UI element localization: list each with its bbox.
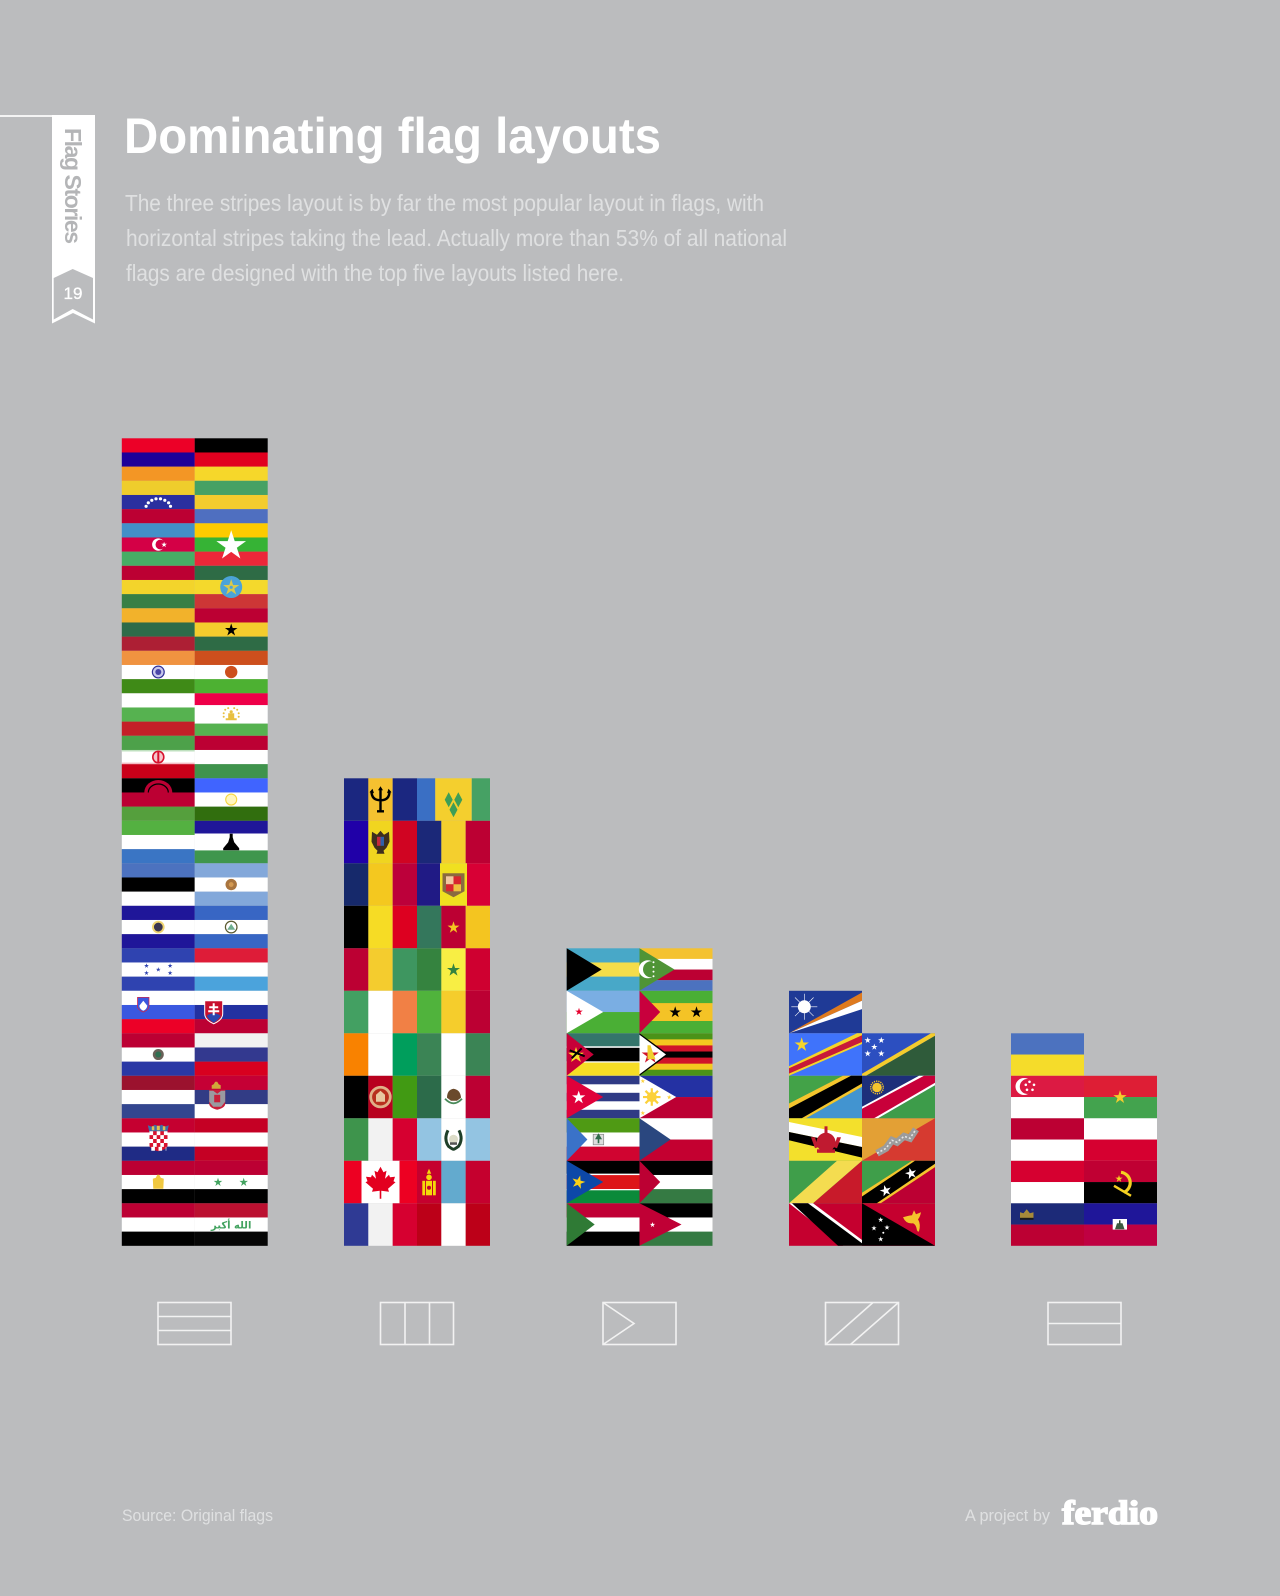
- flag: Mozambique: [567, 1033, 640, 1076]
- flag: Brunei: [789, 1118, 862, 1161]
- source note: Source: Original flags: [122, 1506, 273, 1525]
- flag: Niger: [195, 651, 268, 693]
- flag: Equatorial Guinea: [567, 1118, 640, 1161]
- flag: Monaco-style red white: [1011, 1118, 1084, 1161]
- flag: Peru: [417, 1203, 490, 1246]
- flag: Cameroon: [417, 906, 490, 948]
- column: horizontal two stripes: [1011, 1033, 1157, 1246]
- intro text: horizontal stripes taking the lead. Actually more than 53% of all national: [126, 225, 787, 251]
- flag: Indonesia: [1011, 1161, 1084, 1203]
- flag: Andorra: [417, 863, 490, 906]
- column: diagonal: [789, 991, 935, 1246]
- intro text: flags are designed with the top five layouts listed here.: [126, 260, 624, 286]
- flag: Ivory Coast: [344, 1033, 417, 1076]
- flag: Tanzania: [789, 1076, 862, 1118]
- flag: India: [122, 651, 195, 693]
- flag: Germany: [195, 438, 268, 481]
- icon: three vertical stripes: [380, 1302, 454, 1344]
- column: vertical three stripes: [344, 778, 490, 1246]
- flag: Guatemala: [417, 1118, 490, 1161]
- flag: Djibouti: [567, 991, 640, 1033]
- flag: Canada: [344, 1161, 417, 1203]
- flag: Saint Vincent: [417, 778, 490, 821]
- bookmark ribbon: 19: [64, 284, 82, 303]
- flag: Egypt: [122, 1161, 195, 1203]
- flag: Bhutan: [862, 1118, 935, 1161]
- flag: Mexico: [417, 1076, 490, 1118]
- credit: ferdio: [1062, 1495, 1158, 1532]
- intro text: The three stripes layout is by far the most popular layout in flags, with: [125, 190, 764, 216]
- flag: Slovenia: [122, 991, 195, 1033]
- flag: Romania: [417, 821, 490, 863]
- flag: Barbados: [344, 778, 417, 821]
- flag: Russia: [195, 1033, 268, 1076]
- flag: Jordan: [640, 1203, 712, 1246]
- flag: Saint Kitts and Nevis: [862, 1161, 935, 1203]
- title: Dominating flag layouts: [124, 108, 661, 164]
- flag: Sudan: [567, 1203, 640, 1246]
- flag: Syria: [195, 1161, 268, 1203]
- flag: Mongolia: [417, 1161, 490, 1203]
- flag: Philippines: [640, 1076, 712, 1118]
- flag: El Salvador: [122, 906, 195, 948]
- flag: Cuba: [567, 1076, 640, 1118]
- flag: Czech Republic: [640, 1118, 712, 1161]
- flag: Yemen: [122, 1203, 195, 1246]
- flag: Ghana: [195, 608, 268, 651]
- flag: Argentina: [195, 863, 268, 906]
- flag: Honduras: [122, 948, 195, 991]
- flag: Moldova: [344, 821, 417, 863]
- icon: two horizontal stripes: [1048, 1302, 1121, 1344]
- flag: Comoros: [639, 948, 712, 991]
- intro text: [125, 190, 787, 286]
- flag: Singapore: [1011, 1076, 1084, 1118]
- flag: Bulgaria: [122, 693, 195, 736]
- flag: Italy: [344, 1118, 417, 1161]
- flag: Gabon: [195, 481, 268, 523]
- flag: Poland: [1084, 1118, 1157, 1161]
- flag: Nicaragua: [195, 906, 268, 948]
- flag: Papua New Guinea: [862, 1203, 935, 1246]
- icon: three horizontal stripes: [158, 1302, 231, 1344]
- flag: France: [344, 1203, 417, 1246]
- flag: Palestine: [640, 1161, 712, 1203]
- flag: Lesotho: [195, 821, 268, 863]
- flag: Myanmar: [195, 523, 268, 566]
- flag: Solomon Islands: [862, 1033, 935, 1076]
- icon: diagonal band: [826, 1302, 898, 1344]
- icon: hoist triangle: [603, 1302, 676, 1344]
- flag: Hungary: [195, 736, 268, 778]
- flag: Senegal: [417, 948, 490, 991]
- flag: Liechtenstein: [1011, 1203, 1084, 1246]
- flag: Luxembourg: [195, 948, 268, 991]
- flag: Marshall Islands: [789, 991, 862, 1033]
- flag: Republic of Congo: [789, 1161, 862, 1203]
- column: triangle at hoist: [567, 948, 712, 1246]
- flag: Bahamas: [567, 948, 640, 991]
- flag: Guinea: [344, 948, 417, 991]
- flag: Iran: [122, 736, 195, 778]
- flag: Tajikistan: [195, 693, 268, 736]
- flag: Afghanistan: [344, 1076, 417, 1118]
- flag: Angola: [1084, 1161, 1157, 1203]
- flag: DR Congo: [789, 1033, 862, 1076]
- flag: Estonia: [122, 863, 195, 906]
- flag: Uzbek-style blue white green: [195, 778, 268, 821]
- flag: Ireland: [344, 991, 417, 1033]
- flag: Yugoslavia-style red white blue: [122, 1076, 195, 1118]
- credit: A project by: [965, 1506, 1050, 1525]
- flag: Serbia: [195, 1076, 268, 1118]
- flag: Austria: [195, 1118, 268, 1161]
- flag: Malawi: [122, 778, 195, 821]
- column: horizontal three stripes: [122, 438, 268, 1246]
- flag: Burkina Faso: [1084, 1076, 1157, 1118]
- flag: Trinidad and Tobago: [789, 1203, 862, 1246]
- flag: Haiti: [1084, 1203, 1157, 1246]
- credit: [965, 1495, 1158, 1532]
- flag: Belgium: [344, 906, 417, 948]
- flag: Croatia: [122, 1118, 195, 1161]
- flag: South Sudan: [567, 1161, 640, 1203]
- flag: Sao Tome: [640, 991, 712, 1033]
- flag: Azerbaijan: [122, 523, 195, 566]
- flag: Venezuela: [122, 481, 195, 523]
- flag: Nigeria: [417, 1033, 490, 1076]
- flag: Paraguay: [122, 1033, 195, 1076]
- flag: Namibia: [862, 1076, 935, 1118]
- flag: Zimbabwe: [640, 1033, 712, 1076]
- flag: Chad: [344, 863, 417, 906]
- flag: Sierra Leone: [122, 821, 195, 863]
- flag: Mali: [417, 991, 490, 1033]
- flag: Ukraine: [1011, 1033, 1084, 1076]
- bookmark ribbon: [0, 115, 95, 324]
- flag: Ethiopia: [195, 566, 268, 608]
- flag: Iraq: الله أكبر: [210, 1218, 251, 1231]
- flag: Bolivia: [122, 566, 195, 608]
- flag: Lithuania: [122, 608, 195, 651]
- flag: Iraq: [195, 1203, 268, 1246]
- flag: Armenia: [122, 438, 195, 481]
- bookmark ribbon: Flag Stories: [60, 128, 86, 244]
- flag: Slovakia: [195, 991, 268, 1033]
